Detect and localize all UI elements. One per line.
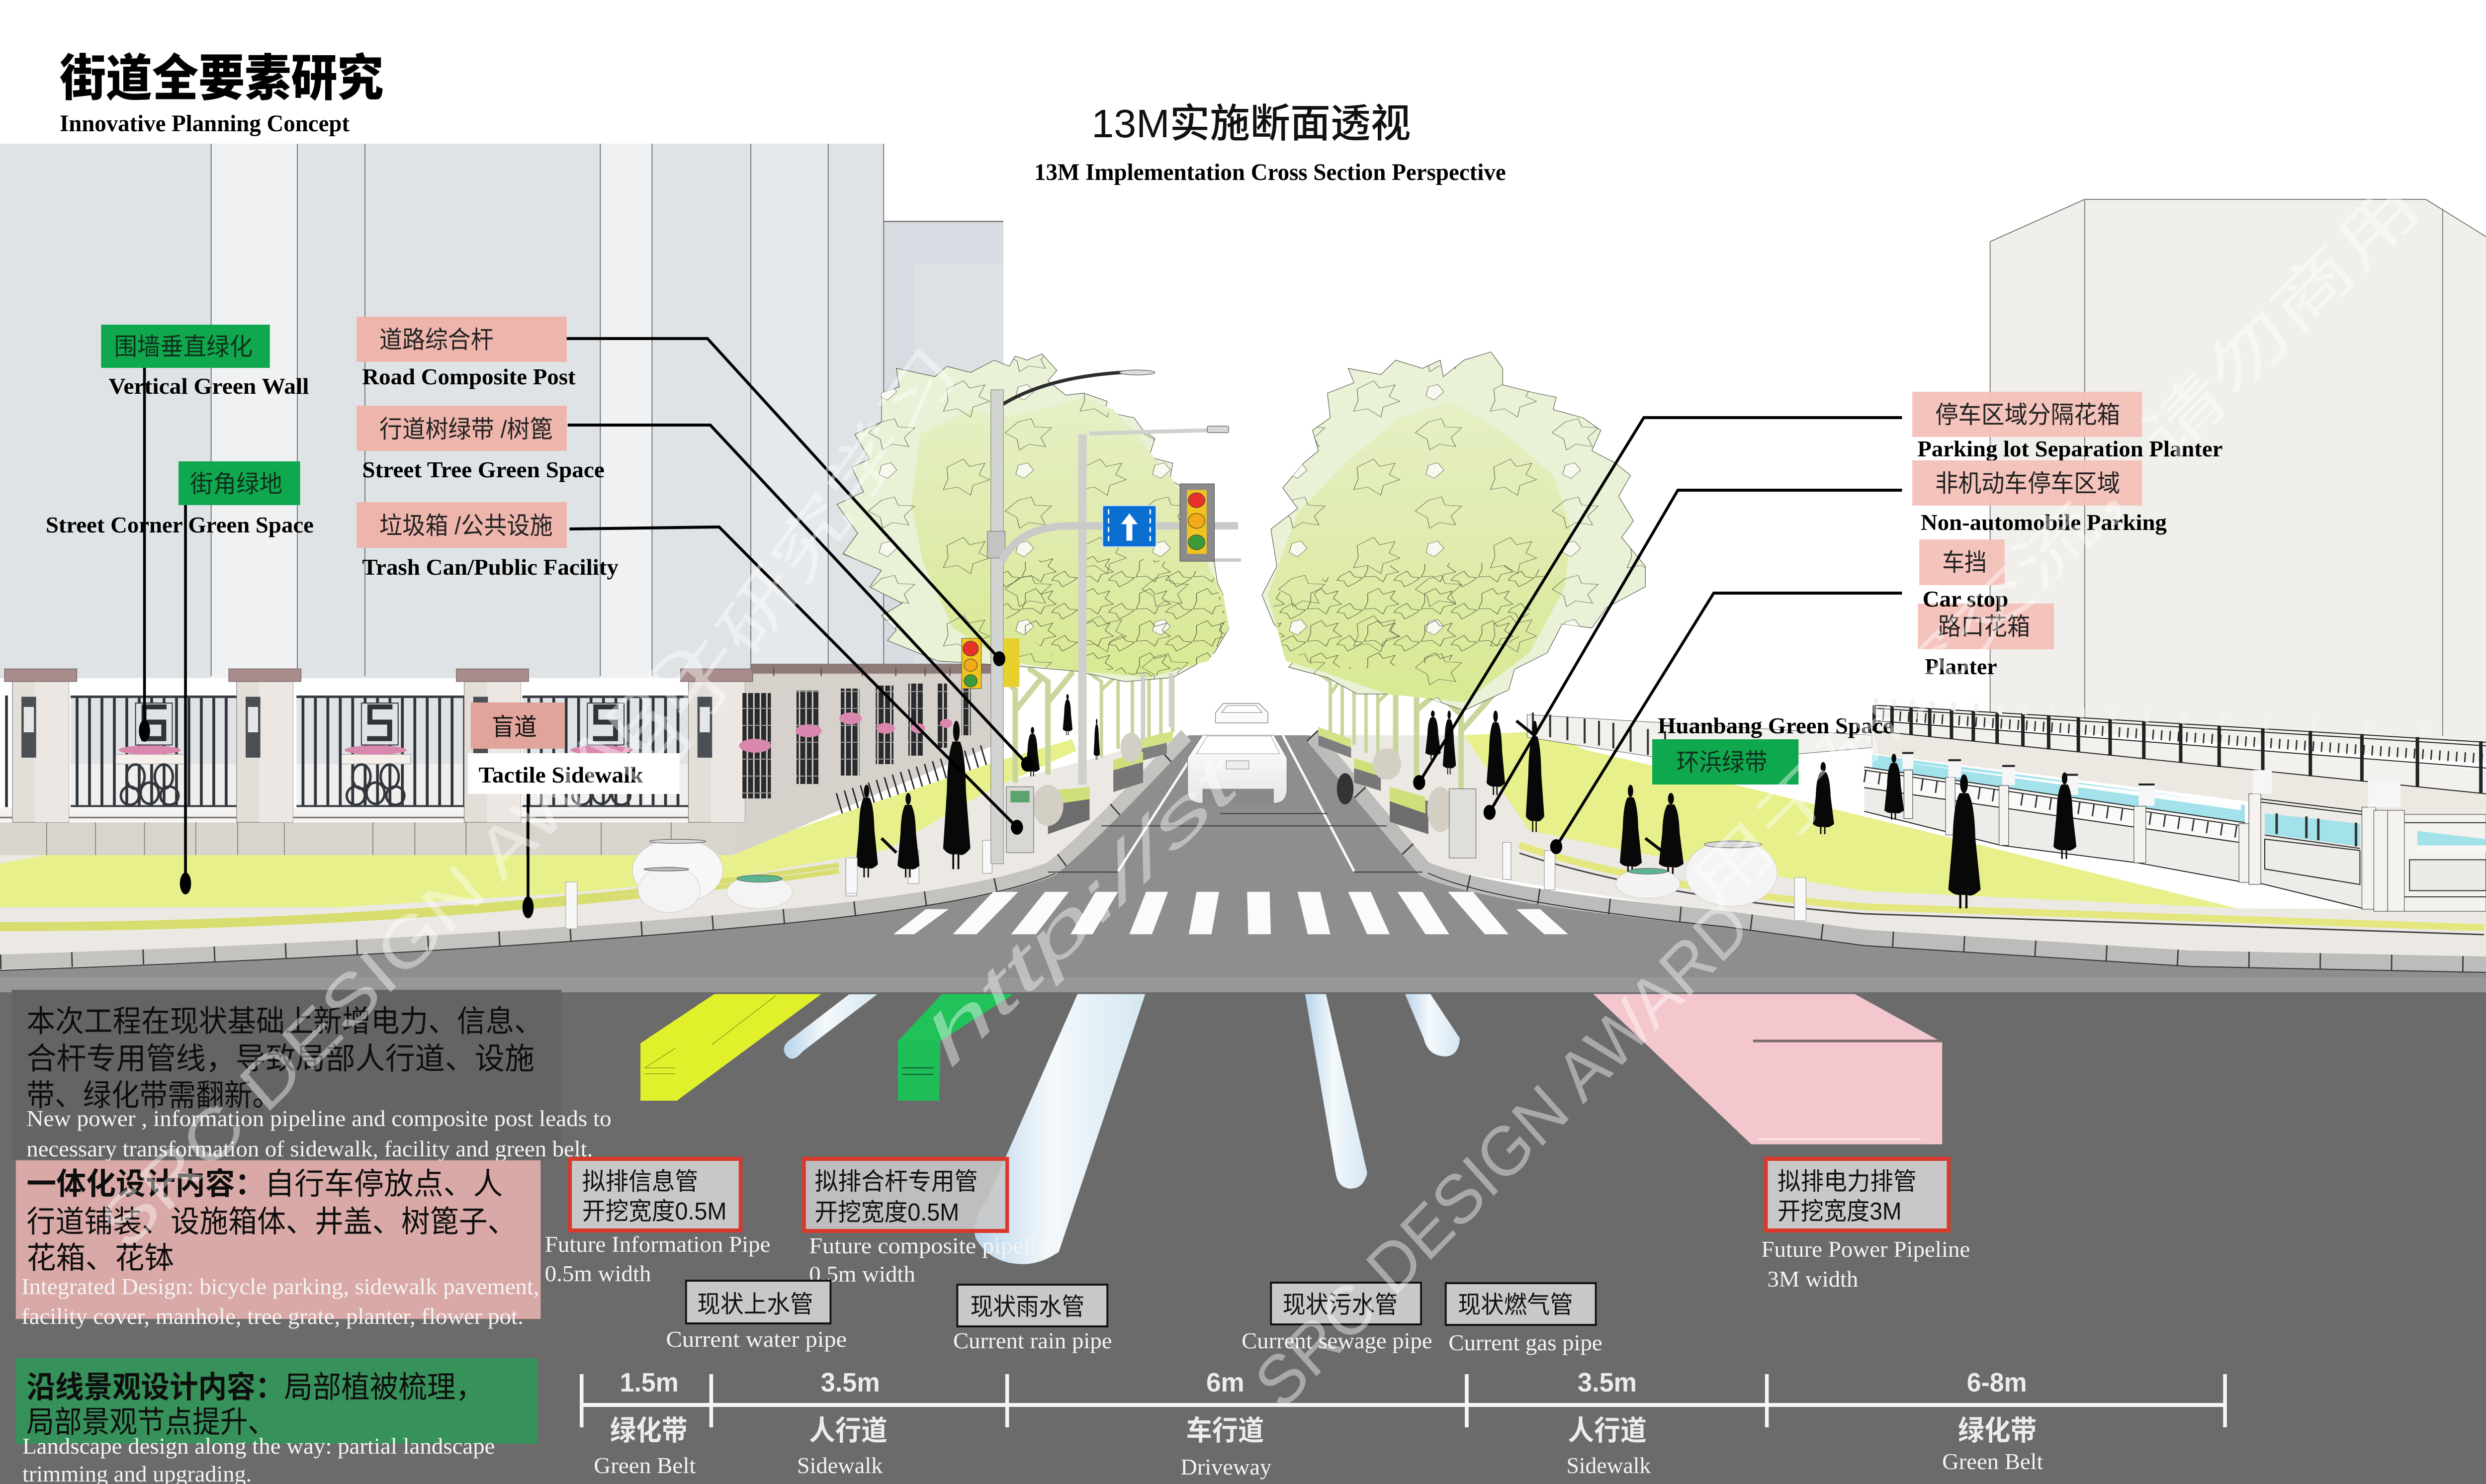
leader: non-automobile parking [1484, 490, 1902, 820]
label: parking lot separation planter: 停车区域分隔花箱 [1935, 402, 2120, 429]
panel: integrated design: facility cover, manhole, tree grate, planter, flower pot. [21, 1304, 524, 1329]
leader: tactile sidewalk [523, 794, 533, 918]
callout: future composite pipeline [804, 1159, 1060, 1287]
panel: integrated design: Integrated Design: bicycle parking, sidewalk pavement, [21, 1274, 539, 1299]
watermark: 用于研究交流，请勿商用 [1678, 167, 2433, 925]
watermark: http://st [911, 739, 1254, 1080]
people silhouettes right [1813, 754, 2076, 908]
leader: parking separation planter [1413, 418, 1902, 790]
upper railing [1874, 698, 2486, 794]
width dimension ruler: Sidewalk [1567, 1453, 1651, 1478]
lower railing [1864, 753, 2486, 911]
panel: project description: 本次工程在现状基础上新增电力、信息、 [26, 1004, 543, 1038]
callout: future information pipe: 0.5m width [545, 1261, 651, 1286]
right building [1990, 199, 2486, 746]
width dimension ruler: 车行道 [1186, 1415, 1264, 1446]
leader: street tree [568, 425, 1033, 772]
label: street tree green space [356, 406, 605, 482]
width dimension ruler: 人行道 [1568, 1415, 1647, 1446]
width dimension ruler: 绿化带 [1958, 1415, 2037, 1446]
width dimension ruler: 1.5m [620, 1368, 679, 1397]
river wall and railing [1864, 698, 2486, 911]
callout: future power pipeline: Future Power Pipeline [1761, 1236, 1970, 1262]
panel: integrated design: 一体化设计内容： 自行车停放点、人 [26, 1166, 503, 1201]
left building [0, 144, 1003, 678]
label: tactile sidewalk: 盲道 [492, 714, 537, 741]
title: 街道全要素研究 [60, 50, 383, 106]
current gas pipe [1405, 994, 1460, 1056]
callout: future composite pipeline: Future composite pipeline [809, 1233, 1060, 1258]
left lawn [0, 739, 1076, 907]
callout: future power pipeline: 拟排电力排管 [1777, 1168, 1917, 1195]
leader: car stop and planter [1550, 593, 1902, 854]
callout: current water pipe: Current water pipe [666, 1326, 847, 1352]
callout: future information pipe: 开挖宽度0.5M [582, 1198, 726, 1225]
leader: vertical green wall [139, 368, 150, 742]
panel: project description [11, 990, 612, 1161]
callout: future composite pipeline: 开挖宽度0.5M [815, 1199, 959, 1226]
beige river wall [1872, 731, 2486, 820]
street lamp pole [987, 370, 1229, 864]
trees [837, 352, 1645, 789]
panel: landscape design: 沿线景观设计内容：局部植被梳理， [26, 1370, 484, 1404]
heading: section perspective [1034, 102, 1506, 185]
left tree canopy [837, 354, 1229, 682]
future information duct [640, 994, 821, 1101]
label: road composite post [356, 317, 576, 389]
current rain pipe [975, 994, 1145, 1264]
callout: current water pipe [666, 1281, 847, 1352]
icon: traffic light [1180, 484, 1214, 561]
callout: current sewage pipe [1242, 1283, 1432, 1353]
label: parking lot separation planter: Parking lot Separation Planter [1917, 436, 2222, 461]
label: planter [1918, 604, 2054, 679]
panel: project description: 带、绿化带需翻新。 [26, 1078, 280, 1112]
callout: future composite pipeline: 拟排合杆专用管 [815, 1168, 978, 1195]
right sidewalk [1310, 735, 2486, 957]
label: trash can public facility [356, 502, 619, 580]
callout: future information pipe [545, 1159, 770, 1286]
watermark [86, 167, 2433, 1423]
callout: future power pipeline: 3M width [1768, 1266, 1858, 1292]
crosswalk [893, 892, 1568, 934]
current water pipe [784, 994, 877, 1059]
panel: project description: New power , information pipeline and composite post leads to [26, 1106, 612, 1131]
callout: current gas pipe: Current gas pipe [1448, 1330, 1602, 1355]
people silhouettes left and centre [856, 694, 1684, 877]
callout: future power pipeline: 开挖宽度3M [1777, 1198, 1902, 1225]
left sidewalk [0, 735, 1185, 962]
panel: landscape design [16, 1358, 538, 1484]
width dimension ruler: Green Belt [594, 1453, 696, 1478]
callout: current sewage pipe: Current sewage pipe [1242, 1328, 1432, 1353]
width dimension ruler: Driveway [1180, 1454, 1272, 1480]
watermark: SRC DESIGN AWARD [1241, 885, 1763, 1423]
left planters [1033, 731, 1173, 834]
panel: integrated design [16, 1160, 540, 1329]
canal water [1872, 755, 2245, 824]
panel: integrated design: 行道铺装、设施箱体、井盖、树篦子、 [26, 1204, 517, 1238]
right planters [1319, 727, 1453, 834]
width dimension ruler: 绿化带 [610, 1415, 688, 1446]
icon: blue lane sign [1103, 506, 1156, 547]
road markings [893, 735, 1568, 934]
label: huanbang green space: 环浜绿带 [1677, 749, 1768, 776]
underground section [0, 992, 2486, 1484]
label: street tree green space: Street Tree Green Space [362, 457, 605, 482]
label: street corner green space [46, 461, 314, 537]
planter vases [566, 839, 1806, 929]
leader: road composite post [565, 339, 1005, 666]
width dimension ruler: 6m [1206, 1368, 1244, 1397]
panel: landscape design: 局部景观节点提升、 [26, 1404, 275, 1439]
distant river railing [1527, 712, 1872, 758]
callout: current water pipe: 现状上水管 [697, 1291, 813, 1318]
width dimension ruler [582, 1368, 2225, 1480]
label: trash can public facility: 垃圾箱 /公共设施 [379, 513, 553, 539]
subtitle: Innovative Planning Concept [60, 111, 350, 137]
label: huanbang green space: Huanbang Green Space [1658, 713, 1893, 738]
icon: small traffic signal [962, 638, 1019, 689]
callout: current rain pipe: 现状雨水管 [971, 1294, 1084, 1320]
leader lines [139, 339, 1902, 918]
width dimension ruler: 3.5m [821, 1368, 880, 1397]
callout: future power pipeline [1761, 1159, 1970, 1292]
label: street corner green space: 街角绿地 [190, 471, 282, 498]
label: vertical green wall [101, 325, 309, 399]
label: road composite post: 道路综合杆 [379, 327, 494, 353]
panel: project description: 合杆专用管线，导致局部人行道、设施 [26, 1041, 534, 1075]
callout: current gas pipe: 现状燃气管 [1458, 1292, 1573, 1318]
left fence and wall [0, 667, 993, 855]
bollards [846, 840, 1555, 896]
panel: project description: necessary transformation of sidewalk, facility and green belt. [26, 1136, 593, 1161]
callout: future composite pipeline: 0.5m width [809, 1261, 915, 1287]
label: road composite post: Road Composite Post [362, 364, 576, 389]
road [0, 735, 2486, 992]
current sewage pipe [1305, 994, 1367, 1189]
callout: current rain pipe [953, 1285, 1112, 1353]
street furniture [846, 370, 1555, 896]
callout: current rain pipe: Current rain pipe [953, 1328, 1112, 1353]
leader: trash can [569, 527, 1023, 835]
callout: future information pipe: 拟排信息管 [582, 1168, 698, 1195]
label: car stop: Car stop [1923, 586, 2008, 611]
label: street corner green space: Street Corner Green Space [46, 512, 314, 537]
width dimension ruler: Sidewalk [797, 1453, 883, 1478]
label: huanbang green space [1652, 713, 1893, 785]
label: planter: 路口花箱 [1938, 613, 2030, 640]
label: vertical green wall: 围墙垂直绿化 [114, 334, 253, 360]
signal arm [1001, 526, 1238, 562]
curbs [0, 735, 2486, 972]
width dimension ruler: 人行道 [809, 1415, 888, 1446]
future power duct [1593, 994, 1942, 1144]
label: parking lot separation planter [1912, 392, 2222, 461]
callout: future information pipe: Future Information Pipe [545, 1231, 770, 1257]
label: planter: Planter [1925, 654, 1997, 679]
label: trash can public facility: Trash Can/Public Facility [362, 554, 619, 580]
callout: current gas pipe [1446, 1283, 1602, 1355]
distant car [1216, 703, 1268, 723]
panel: integrated design: 花箱、花钵 [26, 1240, 174, 1275]
label: tactile sidewalk: Tactile Sidewalk [479, 762, 643, 787]
width dimension ruler: 3.5m [1578, 1368, 1637, 1397]
band above underground section [0, 977, 2486, 992]
label: street tree green space: 行道树绿带 /树篦 [379, 416, 553, 443]
width dimension ruler: Green Belt [1942, 1449, 2043, 1474]
future composite duct [898, 994, 1014, 1101]
watermark: SRC DESIGN AWARD [86, 626, 724, 1264]
tree trunks [994, 669, 1494, 789]
heading: section perspective: 13M实施断面透视 [1091, 102, 1411, 146]
label: tactile sidewalk [468, 702, 680, 794]
right tree canopy [1262, 352, 1645, 710]
label: non-automobile parking [1912, 460, 2167, 535]
label: car stop: 车挡 [1942, 549, 1987, 576]
callout: current sewage pipe: 现状污水管 [1283, 1292, 1398, 1318]
heading: section perspective: 13M Implementation Cross Section Perspective [1034, 160, 1506, 185]
width dimension ruler: 6-8m [1967, 1368, 2027, 1397]
panel: landscape design: Landscape design along the way: partial landscape [22, 1433, 495, 1459]
utility cabinets [1006, 786, 1476, 858]
label: non-automobile parking: Non-automobile Parking [1921, 510, 2167, 535]
watermark: 用于研究学习 [599, 335, 971, 814]
right lawn [1464, 731, 2237, 908]
leader: street corner green [180, 505, 191, 894]
label: car stop [1919, 539, 2008, 611]
label: vertical green wall: Vertical Green Wall [108, 373, 309, 399]
car [1188, 735, 1287, 804]
label: non-automobile parking: 非机动车停车区域 [1935, 470, 2120, 497]
